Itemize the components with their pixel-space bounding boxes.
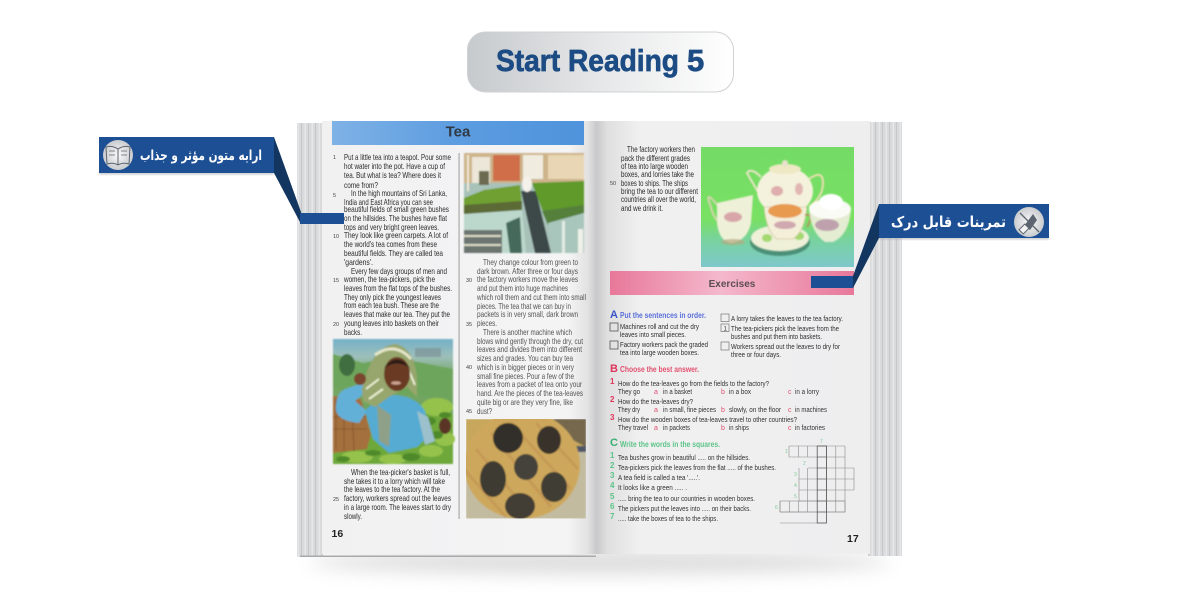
right page intro text: countries all over the world, xyxy=(621,195,696,204)
left page line numbers: 15 xyxy=(333,278,339,284)
page number 16: 16 xyxy=(332,528,343,540)
left page column text: slowly. xyxy=(344,511,362,521)
left page line numbers: 1 xyxy=(333,155,336,161)
right column text: hand. Are the pieces of the tea-leaves xyxy=(477,388,583,398)
left page column text: from each tea bush. These are the xyxy=(344,300,439,310)
photo: tea on tray xyxy=(464,411,586,519)
left page line numbers: 20 xyxy=(333,322,339,328)
photo: tea drying room xyxy=(464,153,584,253)
left page column text: come from? xyxy=(344,180,378,190)
left page column text: They only pick the youngest leaves xyxy=(344,292,441,302)
title badge xyxy=(468,32,734,92)
left page column text: the world's tea comes from these xyxy=(344,239,437,249)
right column text: packets is in very small, dark brown xyxy=(477,309,578,319)
crossword grid: 3 xyxy=(794,472,797,478)
exercise B: choose the best answer: How do the wooden boxes of tea-leaves travel to other countries? xyxy=(618,417,797,424)
left page heading: Tea xyxy=(332,121,584,145)
right column text: leaves and divides them into different xyxy=(477,344,583,354)
right page intro text: pack the different grades xyxy=(621,154,690,163)
exercise A: put the sentences in order: 1 xyxy=(724,326,728,332)
left page column text: young leaves into baskets on their xyxy=(344,318,439,328)
right column text: There is another machine which xyxy=(483,327,572,337)
right column text: blows wind gently through the dry, cut xyxy=(477,336,584,346)
exercise B: choose the best answer: They go xyxy=(618,389,640,396)
callout: right xyxy=(811,204,1049,288)
right column text: quite big or are they very fine, like xyxy=(477,397,573,407)
left page line numbers: 50 xyxy=(610,181,616,187)
left page column text: In the high mountains of Sri Lanka, xyxy=(351,188,447,198)
photo: tea set xyxy=(701,147,854,267)
exercise A: put the sentences in order: Put the sentences in order. xyxy=(620,311,706,320)
left page column text: women, the tea-pickers, pick the xyxy=(343,274,435,284)
exercise B: choose the best answer: a xyxy=(654,389,658,396)
left page xyxy=(322,121,596,554)
right column text: which roll them and cut them into small xyxy=(476,292,586,302)
left page column text: beautiful fields. They are called tea xyxy=(344,248,443,258)
left page line numbers: 40 xyxy=(466,365,472,371)
right column text: pieces. The tea that we can buy in xyxy=(477,301,571,311)
exercise C: write the words in the squares: 2 xyxy=(610,461,615,470)
right column text: which is in bigger pieces or in very xyxy=(476,362,575,372)
left page column text: tops and very bright green leaves. xyxy=(344,222,439,232)
exercise C: write the words in the squares: Tea bushes grow in beautiful ..... on the hillsides. xyxy=(618,455,750,462)
left page line numbers xyxy=(333,155,616,503)
right page intro text: The factory workers then xyxy=(627,145,695,154)
exercise A: put the sentences in order: A xyxy=(610,309,618,321)
exercise B: choose the best answer: in packets xyxy=(663,425,690,432)
exercise B: choose the best answer: B xyxy=(610,363,618,375)
exercise B: choose the best answer: c xyxy=(788,425,792,432)
exercise A: put the sentences in order xyxy=(610,309,843,359)
exercise C: write the words in the squares: 1 xyxy=(610,451,615,460)
right page edges xyxy=(868,122,902,556)
exercise B: choose the best answer: in a box xyxy=(729,389,751,396)
exercise C: write the words in the squares: 5 xyxy=(610,492,615,501)
exercises banner xyxy=(610,271,854,295)
exercise A: put the sentences in order: A lorry takes the leaves to the tea factory. xyxy=(731,314,843,323)
right column text: pieces. xyxy=(477,318,497,328)
left page column text: They look like green carpets. A lot of xyxy=(344,230,449,240)
left page column text: on the hillsides. The bushes have flat xyxy=(344,213,448,223)
exercise C: write the words in the squares: ..... bring the tea to our countries in wooden boxes. xyxy=(618,496,755,503)
right page intro text xyxy=(621,145,699,213)
right column text: small fine pieces. Pour a few of the xyxy=(477,371,574,381)
crossword grid: 5 xyxy=(794,494,797,500)
exercise B: choose the best answer: c xyxy=(788,389,792,396)
callout: left: ارایه متون مؤثر و جذاب xyxy=(140,148,262,164)
crossword grid: 2 xyxy=(803,461,806,467)
exercise A: put the sentences in order: leaves into small pieces. xyxy=(620,330,686,339)
column divider xyxy=(458,153,460,519)
left page heading: Tea: Tea xyxy=(446,124,471,140)
exercise C: write the words in the squares: 4 xyxy=(610,481,615,490)
right page intro text: boxes, and lorries take the xyxy=(621,170,694,179)
right page intro text: boxes to ships. The ships xyxy=(621,179,688,188)
left page line numbers: 5 xyxy=(333,193,336,199)
right column text: They change colour from green to xyxy=(483,257,578,267)
right column text: and put them into huge machines xyxy=(477,283,568,293)
page number 17: 17 xyxy=(847,533,859,545)
exercise C: write the words in the squares xyxy=(610,437,776,523)
book bottom edge xyxy=(300,556,596,557)
left page column text: hot water into the pot. Have a cup of xyxy=(344,161,445,171)
crossword grid: 1 xyxy=(785,449,788,455)
exercise B: choose the best answer: b xyxy=(721,389,725,396)
exercise B: choose the best answer: They travel xyxy=(618,425,648,432)
left page column text: factory, workers spread out the leaves xyxy=(344,493,451,503)
exercise B: choose the best answer: b xyxy=(721,407,725,414)
left page edges xyxy=(297,123,323,557)
right column text: dark brown. After three or four days xyxy=(477,266,578,276)
left page column text: India and East Africa you can see xyxy=(344,197,433,207)
left page column text: beautiful fields of small green bushes xyxy=(344,204,449,214)
crossword grid: 4 xyxy=(794,483,797,489)
exercise B: choose the best answer: a xyxy=(654,407,658,414)
exercise C: write the words in the squares: 7 xyxy=(610,512,615,521)
exercises banner: Exercises xyxy=(709,279,756,290)
left page column text xyxy=(343,152,452,521)
left page line numbers: 35 xyxy=(466,322,472,328)
exercise B: choose the best answer: in small, fine pieces xyxy=(663,407,716,414)
exercise C: write the words in the squares: 3 xyxy=(610,471,615,480)
exercise A: put the sentences in order: tea into large wooden boxes. xyxy=(620,348,699,357)
left page column text: leaves that make our tea. They put the xyxy=(344,309,450,319)
crossword grid: 7 xyxy=(820,439,823,445)
left page line numbers: 10 xyxy=(333,234,339,240)
exercise B: choose the best answer: How do the tea-leaves dry? xyxy=(618,399,693,406)
title text: 5 xyxy=(687,43,704,78)
exercise C: write the words in the squares: A tea field is called a tea '.....'. xyxy=(618,475,700,482)
right column text: leaves from a packet of tea onto your xyxy=(477,379,582,389)
callout: right: تمرینات قابل درک xyxy=(891,213,1006,231)
left page column text: the leaves to the tea factory. At the xyxy=(344,484,440,494)
exercise C: write the words in the squares: It looks like a green ..... . xyxy=(618,485,687,492)
exercise B: choose the best answer: 3 xyxy=(610,413,615,422)
title text: Start Reading xyxy=(496,43,679,78)
exercise C: write the words in the squares: 6 xyxy=(610,502,615,511)
right page intro text: bring the tea to our different xyxy=(621,187,699,196)
exercise B: choose the best answer: slowly, on the floor xyxy=(729,407,782,414)
right column text: sizes and grades. You can buy tea xyxy=(477,353,573,363)
exercise C: write the words in the squares: Tea-pickers pick the leaves from the flat ..... of the bushes. xyxy=(618,465,776,472)
exercise A: put the sentences in order: Machines roll and cut the dry xyxy=(620,322,699,331)
exercise B: choose the best answer: Choose the best answer. xyxy=(620,365,699,374)
exercise A: put the sentences in order: The tea-pickers pick the leaves from the xyxy=(731,324,839,333)
right column text: the factory workers move the leaves xyxy=(477,274,578,284)
exercise B: choose the best answer: a xyxy=(654,425,658,432)
left page column text: leaves from the flat tops of the bushes. xyxy=(344,283,452,293)
left page column text: backs. xyxy=(344,327,362,337)
exercise B: choose the best answer: in machines xyxy=(795,407,827,414)
exercise C: write the words in the squares: ..... take the boxes of tea to the ships. xyxy=(618,516,718,523)
exercise C: write the words in the squares: The pickers put the leaves into ..... on their backs. xyxy=(618,506,751,513)
exercise C: write the words in the squares: Write the words in the squares. xyxy=(620,440,720,449)
left page column text: Every few days groups of men and xyxy=(351,266,447,276)
exercise B: choose the best answer: in a lorry xyxy=(795,389,819,396)
icon: open book xyxy=(103,140,133,170)
left page column text: tea. But what is tea? Where does it xyxy=(344,170,441,180)
exercise A: put the sentences in order: Factory workers pack the graded xyxy=(620,340,708,349)
crossword grid: 6 xyxy=(775,505,778,511)
exercise B: choose the best answer: c xyxy=(788,407,792,414)
left page line numbers: 45 xyxy=(466,409,472,415)
crossword grid xyxy=(775,439,854,523)
exercise A: put the sentences in order: bushes and put them into baskets. xyxy=(731,332,822,341)
exercise B: choose the best answer: in a basket xyxy=(663,389,692,396)
exercise B: choose the best answer: How do the tea-leaves go from the fields to the factory? xyxy=(618,381,769,388)
exercise B: choose the best answer: 1 xyxy=(610,377,615,386)
exercise B: choose the best answer: in factories xyxy=(795,425,825,432)
left page column text: she takes it to a lorry which will take xyxy=(344,476,445,486)
icon: hand writing xyxy=(1014,207,1044,237)
exercise B: choose the best answer: 2 xyxy=(610,395,615,404)
right page xyxy=(596,121,870,554)
right column text: dust? xyxy=(477,406,492,416)
right page intro text: and we drink it. xyxy=(621,204,663,213)
book shadow xyxy=(310,550,890,574)
left page line numbers: 25 xyxy=(333,497,339,503)
exercise B: choose the best answer xyxy=(610,363,827,432)
exercise B: choose the best answer: in ships xyxy=(729,425,749,432)
exercise A: put the sentences in order: three or four days. xyxy=(731,350,781,359)
left page column text: Put a little tea into a teapot. Pour some xyxy=(344,152,451,162)
left page column text: 'gardens'. xyxy=(344,257,373,267)
callout: left xyxy=(99,137,344,224)
open book xyxy=(297,121,902,574)
exercise C: write the words in the squares: C xyxy=(610,437,618,449)
left page column text: When the tea-picker's basket is full, xyxy=(351,467,450,477)
exercise A: put the sentences in order: Workers spread out the leaves to dry for xyxy=(731,342,840,351)
left page column text: in a large room. The leaves start to dry xyxy=(344,502,452,512)
exercise B: choose the best answer: b xyxy=(721,425,725,432)
photo: tea picker woman xyxy=(333,339,455,464)
exercise B: choose the best answer: They dry xyxy=(618,407,640,414)
right column text xyxy=(476,257,586,416)
left page line numbers: 30 xyxy=(466,278,472,284)
right page intro text: of tea into large wooden xyxy=(621,162,688,171)
